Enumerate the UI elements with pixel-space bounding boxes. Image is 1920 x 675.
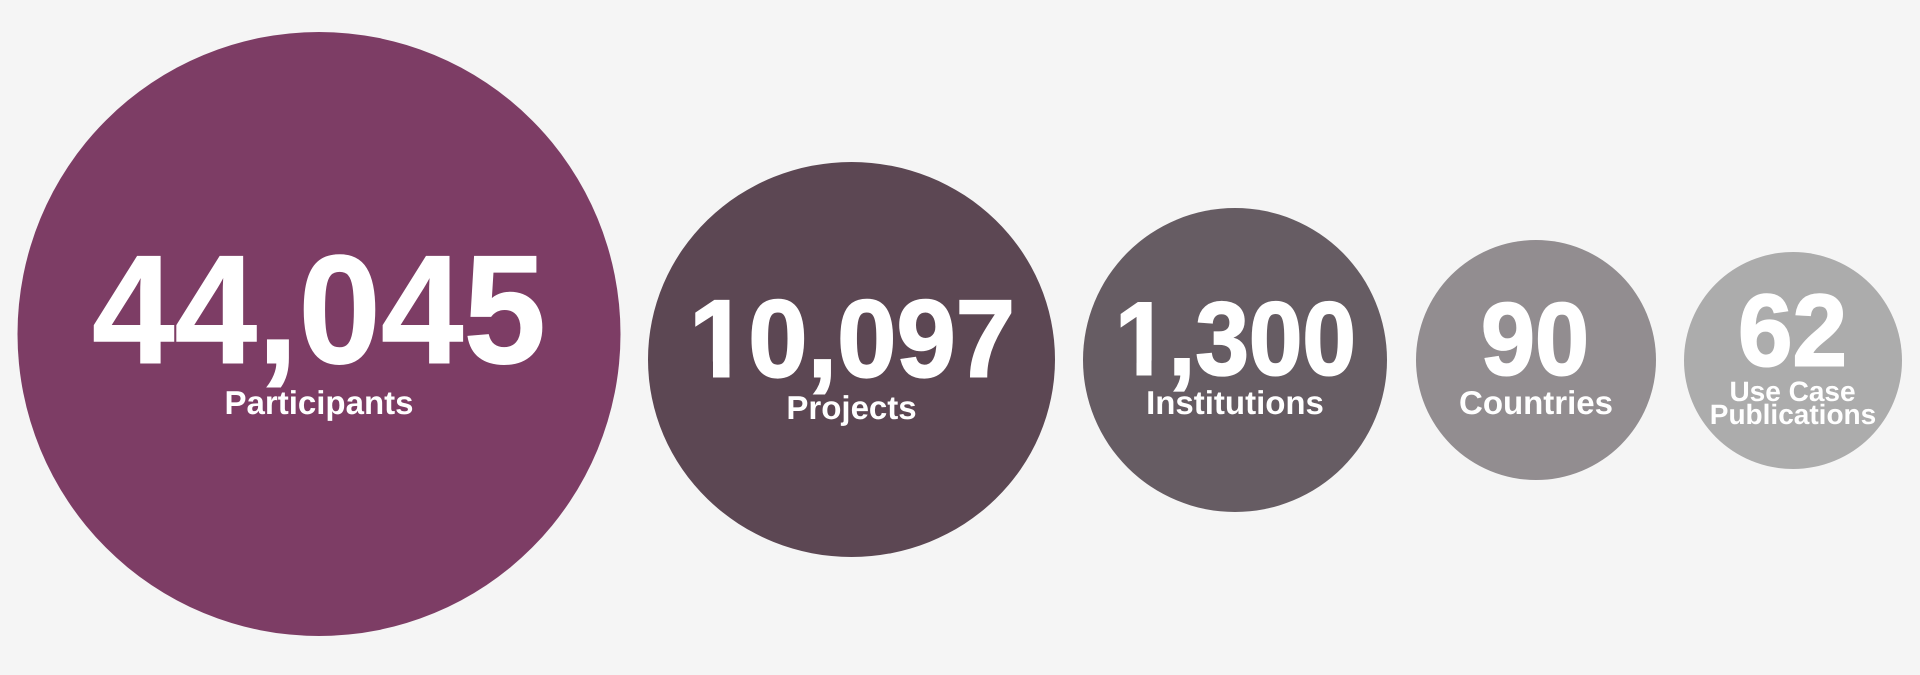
label: Use Case: Use Case (1729, 376, 1856, 407)
label: Institutions: Institutions (1146, 384, 1324, 421)
number: 10,097: 10,097 (689, 278, 1015, 400)
number: 90: 90 (1481, 282, 1589, 396)
label: Publications: Publications (1710, 399, 1876, 430)
panel: institutions circle (1083, 208, 1387, 512)
panel: participants circle (18, 32, 620, 636)
label: Projects: Projects (786, 389, 917, 426)
number: 62: 62 (1738, 274, 1847, 388)
panel: use case publications circle (1684, 252, 1902, 469)
number: 44,045: 44,045 (92, 223, 546, 396)
label: Participants: Participants (225, 384, 413, 421)
label: Countries: Countries (1459, 384, 1613, 421)
panel: projects circle (648, 162, 1055, 557)
number: 1,300: 1,300 (1115, 282, 1356, 398)
panel: countries circle (1416, 240, 1656, 480)
